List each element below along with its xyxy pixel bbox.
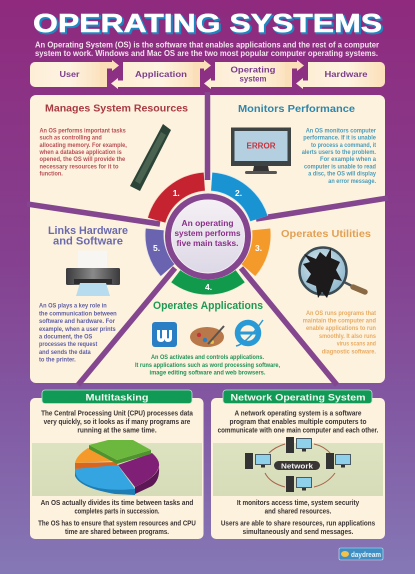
computer: left	[245, 453, 271, 469]
segment 5: 5.	[153, 243, 160, 253]
chart band	[32, 443, 202, 496]
title: OPERATING SYSTEMS	[34, 10, 384, 40]
intro text: The Central Processing Unit (CPU) processes data	[41, 409, 194, 418]
body text: function.	[40, 171, 63, 178]
body text	[135, 354, 280, 377]
logo: daydream	[339, 548, 383, 560]
body text: An OS activates and controls applications.	[151, 354, 264, 361]
computer: right	[326, 453, 351, 469]
segment 1: 1.	[173, 188, 180, 198]
network diagram	[245, 437, 351, 492]
body text: diagnostic software.	[322, 348, 376, 355]
body text: enable applications to run	[306, 325, 376, 332]
body text: when a database application is	[39, 149, 122, 156]
closing text	[38, 498, 196, 536]
closing text: and shared resources.	[265, 506, 331, 515]
body text	[39, 127, 127, 178]
title: OPERATING SYSTEMS	[33, 8, 382, 38]
body text: and sends the data	[39, 349, 91, 356]
intro text	[35, 40, 379, 58]
segment 4: 4.	[205, 282, 212, 292]
centre circle: system performs	[174, 229, 241, 238]
heading: and Software	[53, 236, 123, 248]
box: application	[123, 62, 200, 87]
closing text: Users are able to share resources, run applications	[221, 519, 375, 528]
arrow: operating system to hardware	[285, 60, 304, 87]
intro text	[41, 409, 194, 434]
box: operating system: Operating	[230, 64, 276, 74]
body text: computer is unable to read	[304, 164, 376, 170]
heading: Operates Utilities	[281, 228, 371, 240]
network label: Network	[281, 463, 313, 470]
closing text	[221, 498, 375, 536]
heading bar	[223, 390, 372, 404]
intro text: An Operating System (OS) is the software that enables applications and the rest of a computer	[35, 40, 379, 50]
icon: monitor showing error: ERROR	[246, 142, 276, 150]
arrow: application to user	[111, 62, 130, 89]
main tasks panel background	[30, 95, 385, 383]
intro text: very quickly, so it looks as if many programs are	[44, 417, 190, 426]
body text: software and hardware. For	[39, 318, 116, 325]
heading: Monitors Performance	[238, 103, 355, 115]
panel: manages system resources	[39, 102, 188, 191]
box: hardware: Hardware	[324, 69, 368, 79]
panel dividers	[27, 92, 388, 385]
closing text: The OS has to ensure that system resources and CPU	[38, 519, 196, 528]
body text: opened, the OS will provide the	[40, 156, 126, 163]
body text: alerts users to the problem.	[302, 149, 376, 156]
panel: operates utilities	[281, 228, 376, 355]
icon: magnifying glass over bug	[300, 248, 365, 298]
body text: to the printer.	[39, 357, 76, 364]
intro text: program that enables multiple computers to	[230, 417, 367, 426]
intro text	[218, 409, 378, 434]
body text: An OS performs important tasks	[40, 127, 126, 134]
body text: smoothly. It also runs	[319, 333, 376, 340]
body text: to process a command, it	[311, 142, 376, 149]
body text: the communication between	[39, 310, 117, 318]
closing text: An OS actually divides its time between tasks and	[41, 498, 193, 507]
intro text: system to work. Windows and Mac OS are the two most popular computer operating systems.	[35, 49, 378, 58]
heading: Links Hardware	[48, 225, 128, 237]
intro text: running at the same time.	[77, 425, 157, 434]
box: operating system: system	[240, 74, 267, 84]
heading bar	[42, 390, 192, 404]
arrow: hardware to operating system	[296, 62, 315, 89]
heading bar: Network Operating System	[230, 392, 366, 404]
flow diagram: user, application, operating system, hardware	[30, 60, 385, 89]
panel: links hardware and software	[39, 225, 128, 364]
body text: For example when a	[320, 156, 377, 163]
closing text: time are shared between programs.	[65, 527, 169, 536]
pie chart	[75, 440, 159, 495]
segment 2: 2.	[235, 188, 242, 198]
heading: Operates Applications	[153, 300, 263, 312]
body text: image editing software and web browsers.	[150, 370, 266, 377]
closing text: completes parts in succession.	[74, 506, 160, 515]
body text: processes the request	[39, 341, 97, 348]
body text	[39, 303, 117, 364]
body text: a disc, the OS will display	[308, 171, 376, 178]
body text: a document, the OS	[39, 334, 92, 341]
computer: bottom	[286, 476, 312, 492]
body text: It runs applications such as word processing software,	[135, 362, 280, 369]
central wheel	[153, 182, 262, 292]
intro text: A network operating system is a software	[234, 409, 362, 418]
body text: virus scans and	[337, 341, 376, 348]
icon: word processor	[152, 322, 177, 347]
body text: maintain the computer and	[303, 318, 376, 324]
body text: necessary resources for it to	[40, 164, 119, 170]
segment 3: 3.	[255, 243, 262, 253]
body text	[303, 310, 376, 355]
centre circle	[165, 194, 251, 280]
panel: multitasking	[30, 390, 204, 539]
panel: network operating system	[211, 390, 385, 539]
arrow: application to operating system	[193, 60, 211, 87]
body text: allocating memory. For example,	[40, 142, 127, 149]
icon: memory module	[130, 124, 171, 191]
body text: example, when a user prints	[39, 326, 116, 333]
icon: monitor showing error	[231, 128, 291, 174]
body text: An OS monitors computer	[306, 127, 377, 134]
heading bar: Multitasking	[86, 392, 149, 404]
box: user	[30, 62, 107, 87]
intro text: communicate with one main computer and each other.	[218, 425, 378, 434]
box: user: User	[60, 69, 80, 79]
arrow: user to application	[100, 60, 119, 87]
box: hardware	[308, 62, 385, 87]
logo: daydream: daydream	[351, 552, 381, 559]
heading	[48, 225, 128, 248]
heading: Manages System Resources	[45, 102, 188, 114]
diagram band	[213, 443, 383, 496]
body text: An OS plays a key role in	[39, 303, 107, 310]
arrow: operating system to application	[204, 62, 222, 89]
icon: web browser	[236, 320, 263, 346]
centre circle: An operating	[182, 219, 234, 228]
body text: performance. If it is unable	[303, 134, 377, 142]
body text: such as controlling and	[40, 134, 102, 142]
icon: printer	[66, 250, 120, 296]
closing text: simultaneously and send messages.	[243, 527, 353, 536]
panel: operates applications	[135, 300, 280, 377]
closing text: It monitors access time, system security	[237, 498, 359, 507]
body text: An OS runs programs that	[306, 310, 376, 317]
box: application: Application	[135, 69, 187, 79]
panel: monitors performance	[231, 103, 377, 185]
body text: an error message.	[328, 178, 376, 185]
body text	[302, 127, 377, 185]
computer: top	[286, 437, 312, 453]
centre circle: five main tasks.	[176, 239, 238, 248]
icon: paint palette	[190, 326, 224, 347]
box: operating system	[215, 62, 292, 87]
